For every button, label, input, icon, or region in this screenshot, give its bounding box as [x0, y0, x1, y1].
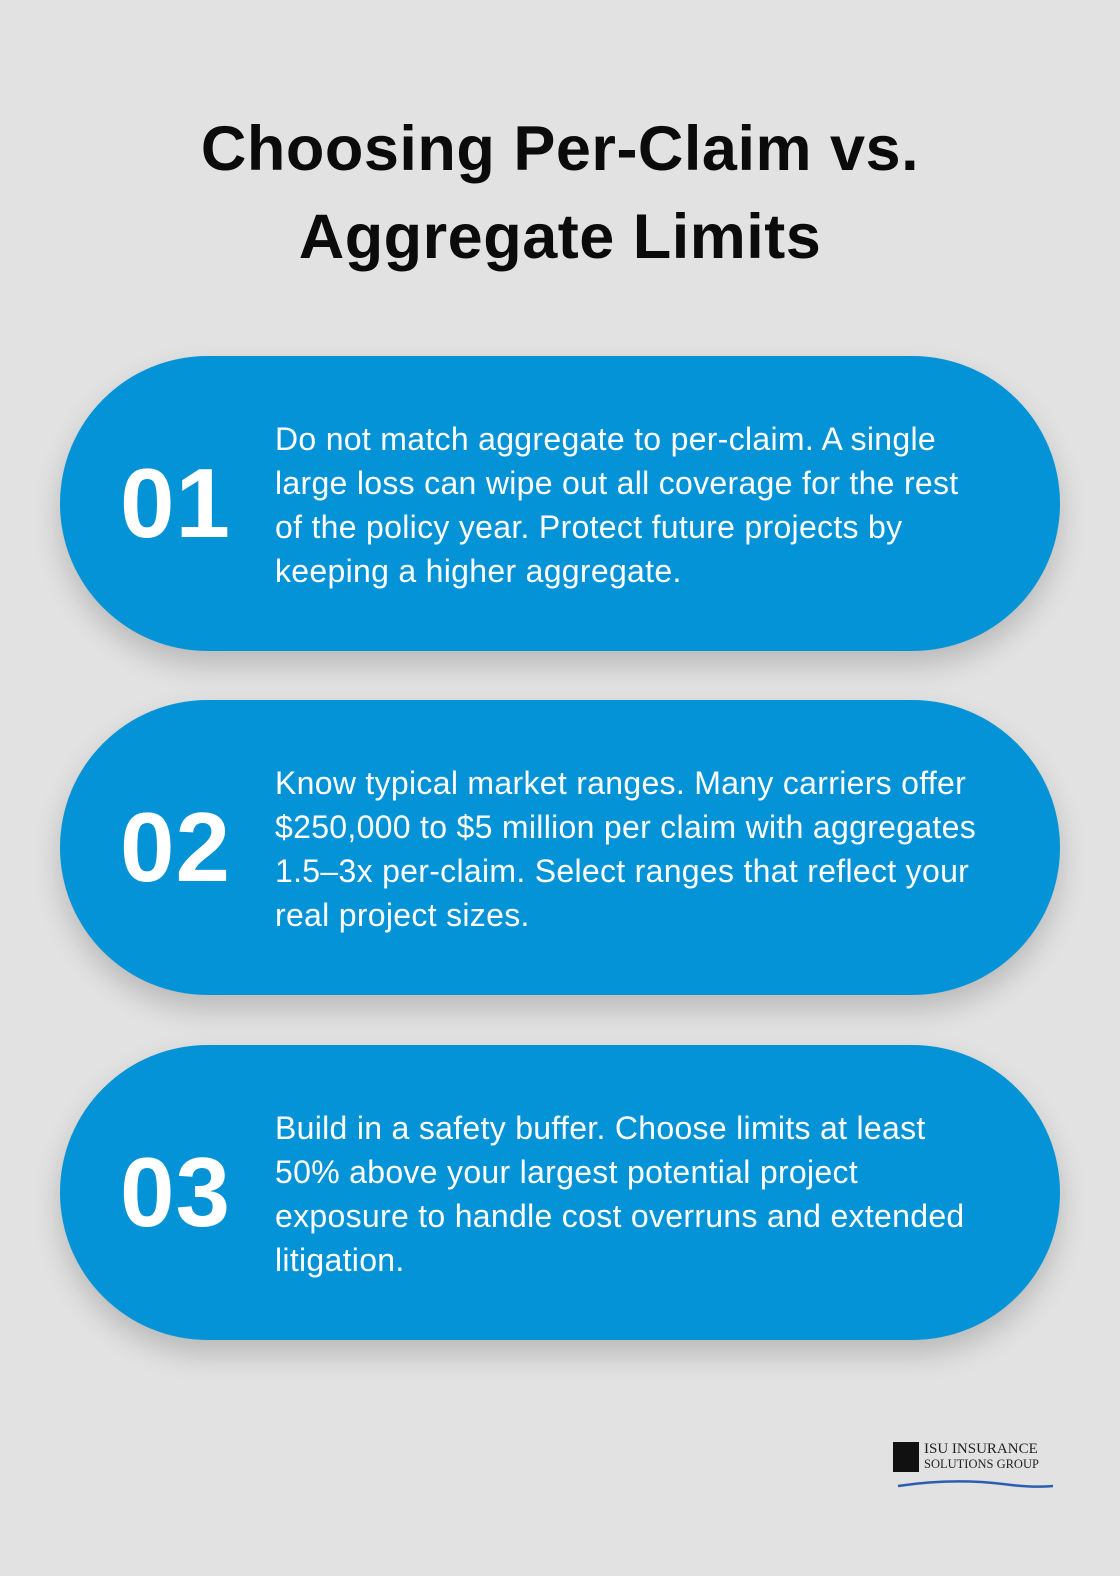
- text 02: $250,000 to $5 million per claim with aggregates: [275, 809, 976, 845]
- text 03: litigation.: [275, 1242, 405, 1278]
- panel: step 03: [60, 1045, 1060, 1340]
- text 01: keeping a higher aggregate.: [275, 553, 682, 589]
- text 02: [275, 765, 976, 933]
- text 02: real project sizes.: [275, 897, 530, 933]
- text 02: 1.5–3x per-claim. Select ranges that reflect your: [275, 853, 969, 889]
- icon: logo mark: [893, 1442, 919, 1472]
- title: Aggregate Limits: [299, 202, 821, 272]
- text 01: Do not match aggregate to per-claim. A single: [275, 421, 936, 457]
- logo swoosh: [898, 1480, 1054, 1488]
- text 01: large loss can wipe out all coverage for the rest: [275, 465, 958, 501]
- panel: step 01: [60, 356, 1060, 651]
- title: [201, 114, 919, 272]
- title: Choosing Per-Claim vs.: [201, 114, 919, 184]
- number 03: 03: [120, 1137, 231, 1247]
- text 03: [275, 1110, 965, 1278]
- number 02: 02: [120, 792, 231, 902]
- logo text: [924, 1441, 1039, 1471]
- text 01: [275, 421, 958, 589]
- logo text: ISU INSURANCE: [924, 1441, 1038, 1457]
- logo: [893, 1441, 1054, 1488]
- text 01: of the policy year. Protect future projects by: [275, 509, 902, 545]
- panel: step 02: [60, 700, 1060, 995]
- logo text: SOLUTIONS GROUP: [924, 1457, 1039, 1471]
- text 02: Know typical market ranges. Many carriers offer: [275, 765, 966, 801]
- number 01: 01: [120, 448, 231, 558]
- text 03: exposure to handle cost overruns and extended: [275, 1198, 965, 1234]
- text 03: Build in a safety buffer. Choose limits at least: [275, 1110, 926, 1146]
- text 03: 50% above your largest potential project: [275, 1154, 858, 1190]
